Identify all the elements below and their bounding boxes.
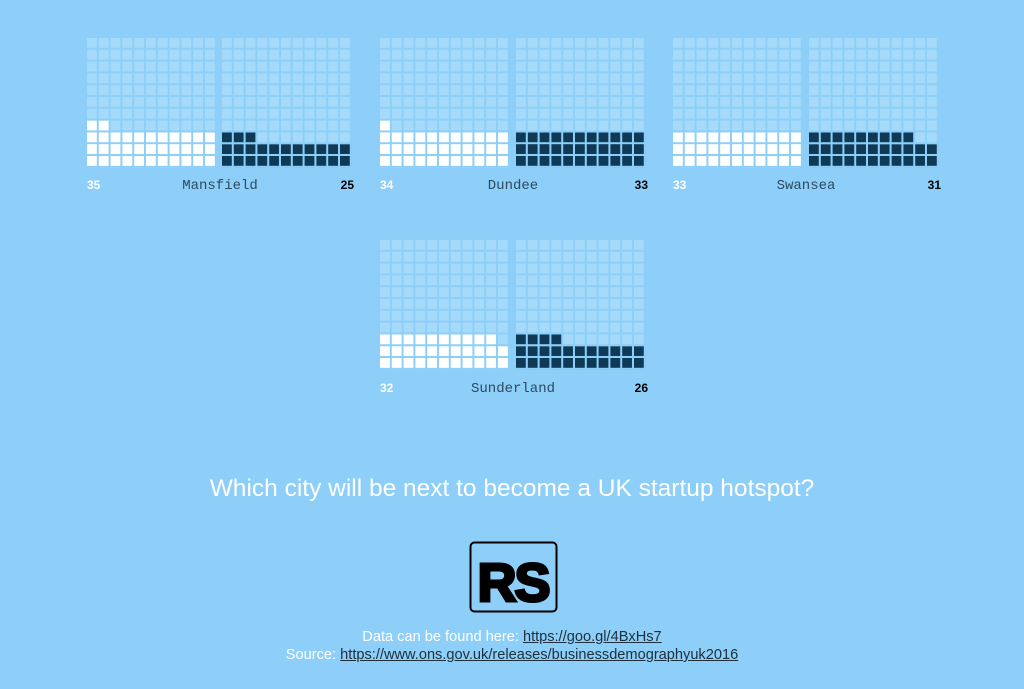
panel: Swansea: 33 — [673, 178, 687, 192]
panel: Sunderland: 32 — [380, 381, 394, 395]
source text: Source: https://www.ons.gov.uk/releases/businessdemographyuk2016 — [286, 647, 738, 663]
icon: RS logo: RS — [477, 553, 549, 613]
panel: Mansfield: Mansfield — [182, 178, 258, 194]
panel: Swansea — [673, 38, 941, 194]
panel: Mansfield: 25 — [341, 178, 354, 192]
panel: Mansfield — [87, 38, 354, 194]
title: Which city will be next to become a UK startup hotspot? — [210, 475, 814, 502]
panel: Dundee: 33 — [635, 178, 648, 192]
panel: Swansea: 31 — [928, 178, 941, 192]
panel: Swansea: Swansea — [777, 178, 835, 194]
panel: Sunderland: Sunderland — [471, 381, 555, 397]
source text: Data can be found here: https://goo.gl/4BxHs7 — [362, 629, 662, 645]
panel: Dundee: Dundee — [488, 178, 538, 194]
panel: Sunderland — [380, 240, 648, 397]
panel: Mansfield: 35 — [87, 178, 101, 192]
source text — [286, 629, 738, 663]
panel: Sunderland: 26 — [635, 381, 648, 395]
panel: Dundee — [380, 38, 648, 194]
panel: Dundee: 34 — [380, 178, 394, 192]
